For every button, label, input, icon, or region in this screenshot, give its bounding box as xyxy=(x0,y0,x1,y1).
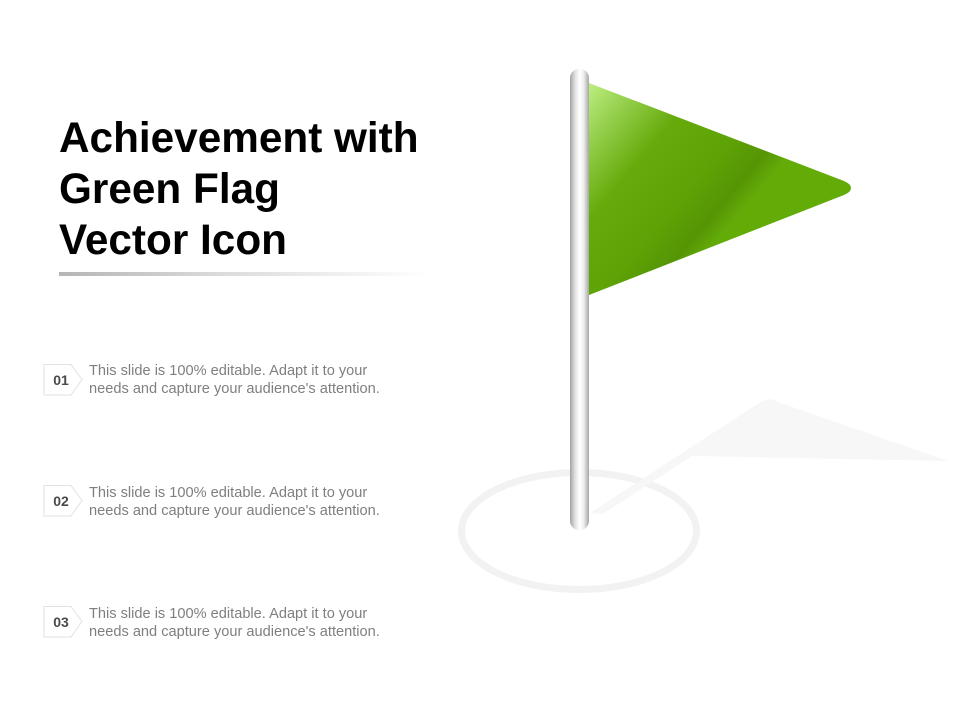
text 2: This slide is 100% editable. Adapt it to your xyxy=(89,485,367,501)
text 1: This slide is 100% editable. Adapt it to your xyxy=(89,363,367,379)
text 2: needs and capture your audience's attention. xyxy=(89,503,380,519)
badge 01 xyxy=(44,364,82,396)
badge 02 xyxy=(44,485,82,516)
item 1 xyxy=(44,363,380,397)
text 1 xyxy=(89,363,380,397)
title: Vector Icon xyxy=(59,216,287,263)
text 3 xyxy=(89,606,380,640)
text 2 xyxy=(89,485,380,519)
flag xyxy=(589,83,851,295)
title: Green Flag xyxy=(59,165,280,212)
flag shadow xyxy=(590,399,948,514)
number 02: 02 xyxy=(53,493,69,509)
ground ring xyxy=(462,472,696,590)
item 3 xyxy=(44,606,380,640)
title xyxy=(59,114,419,263)
badge 03 xyxy=(44,606,82,638)
text 1: needs and capture your audience's attention. xyxy=(89,381,380,397)
title underline xyxy=(59,272,429,276)
item 2 xyxy=(44,485,380,519)
title: Achievement with xyxy=(59,114,419,161)
text 3: This slide is 100% editable. Adapt it to your xyxy=(89,606,367,622)
number 01: 01 xyxy=(53,372,69,388)
number 03: 03 xyxy=(53,614,69,630)
text 3: needs and capture your audience's attention. xyxy=(89,624,380,640)
pole xyxy=(570,69,589,530)
